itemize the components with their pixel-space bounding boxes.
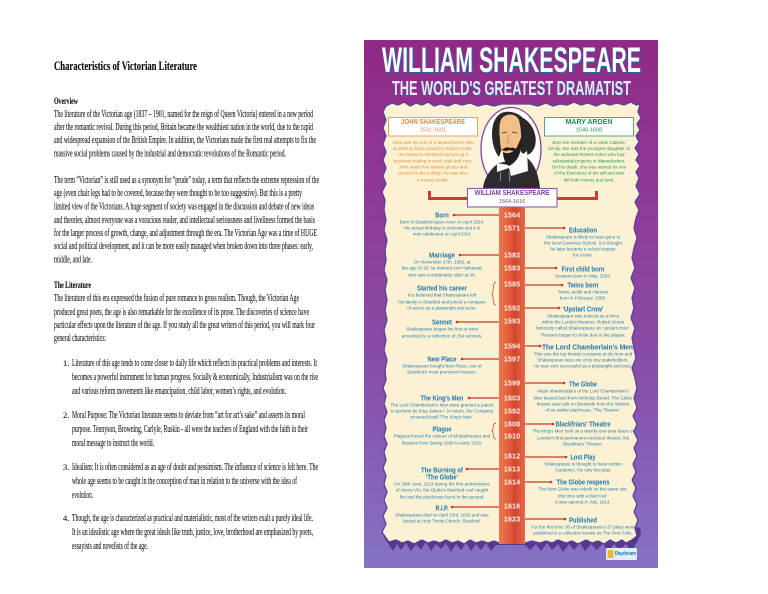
event: The Globe: The Globe	[569, 380, 597, 388]
event: Plague	[394, 424, 491, 446]
paragraph: overview one: massive social problems caused by the industrial and democratic revolutions of the Romantic period.	[54, 148, 286, 160]
Mary Arden card: MARY ARDEN	[566, 119, 612, 126]
event: The Lord Chamberlain's Men: This was the top theatre company at the time and	[534, 352, 633, 356]
event: The Burning of The Globe	[394, 466, 490, 500]
event: Upstart Crow: famously called Shakespeare an 'upstart crow'.	[536, 326, 630, 330]
event: The Globe: of an earlier playhouse, 'The Theatre'.	[545, 408, 621, 412]
event: First child born: Susanna born in May, 1583.	[555, 274, 611, 278]
John Shakespeare card: worked on land owned by Robert Arden.	[393, 146, 473, 151]
paragraph: the literature	[54, 293, 315, 344]
timeline years: 1612	[504, 452, 520, 460]
event: The Globe: theatre was built on Bankside from the timbers	[537, 402, 630, 406]
event: New Place: Shakespeare bought New Place, one of	[402, 364, 482, 368]
John Shakespeare card	[388, 118, 478, 182]
paragraph: overview two: limited view of the Victorians. A huge segment of society was engaged in the discussion and debate of new ideas	[54, 202, 314, 212]
event: The Globe reopens: The New Globe was rebuilt on the same site,	[538, 486, 628, 492]
event: Started his career: his family in Stratford and joined a company	[398, 300, 486, 304]
timeline years: 1610	[504, 432, 520, 440]
event: Lost Play: 'Cardenio', his only lost play.	[555, 468, 611, 472]
John Shakespeare card: 1531-1601	[420, 128, 446, 134]
event: Upstart Crow: within the London theatres. Robert Green	[542, 320, 625, 324]
timeline years: 1597	[504, 354, 520, 364]
event: Sonnet: amounted to a collection of 154 sonnets.	[402, 334, 482, 338]
timeline years: 1613	[504, 464, 520, 474]
event: Education: Education	[569, 226, 597, 234]
timeline years: 1592	[504, 406, 520, 416]
event: Published: Published	[569, 516, 597, 524]
event: Started his career: Started his career	[417, 284, 467, 292]
list item 1	[63, 358, 318, 397]
event: The Globe reopens: The Globe reopens	[556, 478, 610, 486]
event: The King's Men: The Lord Chamberlain's Men were granted a patent	[391, 402, 494, 408]
timeline years: 1592	[504, 304, 520, 312]
event: Lost Play: Lost Play	[570, 452, 596, 462]
event: Education: the local Grammar School. It is thought	[544, 240, 623, 246]
event: Twins born: Twins Judith and Hamnet	[558, 290, 609, 294]
event: Twins born	[558, 280, 609, 300]
John Shakespeare card: purses for the nobility. He was also	[398, 170, 468, 176]
name plate: William Shakespeare: WILLIAM SHAKESPEARE	[474, 190, 550, 197]
event: Marriage: On November 27th, 1582, at	[414, 260, 471, 264]
timeline years	[504, 210, 521, 524]
event: First child born: First child born	[562, 264, 605, 274]
event: Blackfriars' Theatre: Blackfriars' Theatre.	[563, 442, 603, 446]
timeline years: 1583	[504, 264, 520, 272]
event: The King's Men	[391, 394, 494, 420]
event: Born: Born	[435, 210, 449, 220]
John Shakespeare card: business trading in wool, malt and corn.	[393, 158, 473, 164]
event: Education	[544, 226, 623, 258]
event: Education: he later became a school master	[550, 246, 616, 252]
poster background	[364, 40, 658, 568]
Mary Arden card	[544, 118, 634, 182]
Mary Arden card: family, she was the youngest daughter of	[548, 146, 630, 151]
list item 1: and various reform movements like emancipation, child labor, women’s rights, and evolution.	[72, 386, 286, 397]
event: The King's Men: renamed itself 'The King's Men'.	[410, 414, 474, 420]
event: The Burning of The Globe: fire and the playhouse burnt to the ground.	[400, 494, 484, 500]
event: Education: for a time.	[573, 252, 593, 258]
event: The King's Men: to perform by King James I. In return, the Company	[391, 408, 494, 414]
event: Sonnet	[402, 318, 482, 338]
paragraph: overview one: after the romantic revival. During this period, Britain became the wealthiest nation in the world, due to the rapid	[54, 122, 313, 133]
paragraph: the literature: particular effects upon the literature of the age. If you study all the great writers of this period, you will mark four	[54, 320, 315, 331]
list item 2: moral message to instruct the world.	[72, 438, 154, 449]
name plate: William Shakespeare	[468, 188, 557, 207]
list item 1: becomes a powerful instrument for human progress. Socially & economically, Industrialism was on the rise	[72, 372, 318, 383]
event: Born: Born in Stratford-upon-Avon, in April 1564.	[400, 220, 484, 224]
timeline years: 1585	[504, 280, 520, 288]
event: The Globe: Major shareholders of the Lord Chamberlain's	[537, 388, 629, 394]
John Shakespeare card: He moved to Stratford and set up a	[398, 152, 469, 157]
timeline years: 1594	[504, 342, 521, 350]
list item 4: 4.	[63, 513, 69, 523]
event: Plague: theatres from Spring 1608 to early 1610.	[402, 440, 482, 446]
event: Sonnet: Shakespeare began the first of what	[406, 326, 479, 332]
event: New Place: New Place	[428, 354, 456, 364]
list item 3: whole age seems to be caught in the conception of man in relation to the universe with the idea of	[72, 476, 297, 487]
event: Marriage: Marriage	[429, 250, 455, 260]
event: R.I.P.: R.I.P.	[436, 504, 448, 512]
event: The Lord Chamberlain's Men: Shakespeare was one of its key stakeholders.	[537, 358, 629, 362]
name plate: William Shakespeare: 1564-1616	[499, 199, 525, 205]
heading: overview: Overview	[54, 97, 78, 107]
event: Sonnet: Sonnet	[432, 318, 452, 326]
event: The Burning of The Globe: On 29th June, 1613 during the first performance	[394, 482, 490, 486]
document: Characteristics of Victorian Literature	[54, 58, 319, 552]
event: Plague: Plagues forced the closure of all playhouses and	[394, 434, 491, 438]
paragraph: overview two: for the larger process of growth, change, and adjustment through the era. The Victorian Age was a time of HUGE	[54, 228, 317, 239]
subtitle: THE WORLD'S GREATEST DRAMATIST	[392, 77, 631, 100]
paragraph: the literature: general characteristics:	[54, 333, 106, 344]
paragraph: overview two: The term “Victorian” is still used as a synonym for “prude” today, a term that reflects the extreme repression of the	[54, 175, 319, 186]
timeline years: 1623	[504, 514, 520, 524]
Mary Arden card: On his death, she was named as one	[552, 164, 627, 170]
John Shakespeare card: JOHN SHAKESPEARE	[401, 119, 465, 126]
event: The Globe reopens: It was opened in July, 1614.	[555, 500, 611, 504]
event: Published: For the first time 36 of Shakespeare's 37 plays were	[531, 524, 635, 530]
event: Plague: Plague	[432, 424, 452, 434]
paragraph: the literature: produced great poets, the age is also remarkable for the excellence of its prose. The discoveries of science have	[54, 307, 309, 318]
list item 4: Though, the age is characterized as practical and materialistic, most of the writers exalt a purely ideal life.	[72, 513, 313, 524]
Mary Arden card: the widowed Robert Arden who had	[553, 152, 625, 157]
event: Started his career	[398, 284, 486, 310]
event: Born: now celebrated on April 23rd.	[413, 232, 471, 236]
timeline years: 1571	[504, 224, 520, 232]
paragraph: overview two: social and political development, and it can be more easily managed when broken down into three phases: early,	[54, 241, 313, 252]
event: Upstart Crow: 'Upstart Crow'	[562, 304, 604, 314]
event: The Burning of The Globe: of Henry VIII, the Globe's thatched roof caught	[396, 488, 489, 492]
heading: the literature: The Literature	[54, 281, 91, 291]
paragraph: overview one: and widespread expansion of the British Empire. In addition, the Victorians made the first real attempts to fix the	[54, 135, 316, 146]
event: Published: published in a collection known as The First Folio.	[533, 530, 633, 536]
event: R.I.P.: Shakespeare died on April 23rd, 1616 and was	[395, 512, 489, 518]
event: Upstart Crow: Theatres began to close due to the plague.	[540, 332, 626, 338]
event: Blackfriars' Theatre: London's first permanent enclosed theatre, the	[537, 436, 630, 440]
event: The Lord Chamberlain's Men: He was very successful as a playwright and poet.	[534, 364, 632, 368]
paragraph: overview one: The literature of the Victorian age (1837 – 1901, named for the reign of Queen Victoria) entered in a new period	[54, 109, 313, 120]
event: Lost Play: Shakespeare is thought to have written	[544, 462, 622, 466]
John Shakespeare card: John made fine leather gloves and	[399, 164, 468, 170]
Mary Arden card: substantial property in Warwickshire.	[552, 158, 626, 164]
list item 2	[63, 410, 308, 449]
event: The Burning of The Globe: The Burning of	[421, 466, 463, 474]
family tree bracket	[430, 191, 596, 198]
timeline years: 1603	[504, 394, 520, 402]
Mary Arden card: Born the member of a noble Catholic	[552, 140, 626, 145]
John Shakespeare card: John was the son of a tenant farmer who	[392, 140, 474, 145]
event: First child born	[555, 264, 611, 278]
list item 1: 1.	[63, 358, 69, 368]
event: The Globe reopens: this time with a tiled roof.	[558, 494, 608, 498]
event: R.I.P.	[395, 504, 489, 524]
event: The Globe: Men leased land from Nicholas Brend. The Globe	[534, 396, 633, 400]
timeline years: 1608	[504, 420, 520, 428]
event: Published	[531, 516, 635, 536]
poster: William Shakespeare	[364, 40, 658, 568]
event: The Lord Chamberlain's Men	[534, 342, 633, 368]
event: The King's Men: The King's Men	[420, 394, 464, 402]
event: Twins born: born in February, 1585.	[560, 296, 606, 300]
paragraph: overview two: and theories, almost everyone was a voracious reader, and intellectual seriousness and liveliness formed the basis	[54, 215, 315, 226]
event: Lost Play	[544, 452, 622, 472]
paragraph: the literature: The literature of this era expressed the fusion of pure romance to gross realism. Though, the Victorian Age	[54, 293, 299, 304]
list item 3: Idealism: It is often considered as an age of doubt and pessimism. The influence of science is felt here. The	[72, 462, 318, 473]
paragraph: overview two	[54, 175, 319, 266]
event: The Lord Chamberlain's Men: The Lord Chamberlain's Men	[542, 342, 633, 352]
John Shakespeare card: a money lender.	[417, 178, 449, 182]
event: New Place	[402, 354, 482, 374]
event: Marriage: the age of 18, he married Ann Hathaway	[402, 266, 483, 270]
timeline years: 1582	[504, 250, 520, 260]
list item 4	[63, 513, 313, 552]
list item 2: Moral Purpose: The Victorian literature seems to deviate from “art for art’s sake” and asserts its moral	[72, 410, 305, 421]
event: Marriage	[402, 250, 483, 278]
event: The Globe	[534, 380, 633, 412]
document title: Characteristics of Victorian Literature	[54, 58, 197, 73]
list item 3: evolution.	[72, 490, 93, 501]
timeline years: 1616	[504, 502, 520, 510]
event: Blackfriars' Theatre	[532, 420, 634, 446]
list item 4: essayists and novelists of the age.	[72, 541, 148, 552]
paragraph: overview two: age (even chair legs had to be covered, because they were thought to be too suggestive). But this is a pretty	[54, 188, 302, 199]
logo: Daydream: Daydream	[615, 551, 636, 557]
event: Blackfriars' Theatre: Blackfriars' Theatre	[556, 420, 610, 428]
portrait of Shakespeare	[481, 108, 541, 190]
event: Upstart Crow: Shakespeare was noticed as a force	[547, 314, 620, 318]
timeline years: 1599	[504, 378, 520, 388]
list item 2: purpose. Tennyson, Browning, Carlyle, Ruskin - all were the teachers of England with the faith in their	[72, 424, 308, 435]
event: Started his career: of actors as a playwright and actor.	[407, 306, 477, 310]
timeline connector arrows	[452, 215, 566, 519]
paragraph: overview one	[54, 109, 316, 160]
event: Blackfriars' Theatre: The King's Men took on a twenty-one-year lease of	[532, 428, 634, 434]
paragraph: overview two: middle, and late.	[54, 254, 92, 266]
torn edge shadow	[383, 520, 641, 552]
Mary Arden card: left both money and land.	[564, 178, 614, 182]
timeline years: 1593	[504, 316, 520, 326]
event: Born	[400, 210, 484, 236]
timeline years: 1614	[504, 478, 521, 486]
list item 3	[63, 462, 318, 501]
event: Marriage: who was considerably older at 26.	[408, 272, 476, 278]
timeline years: 1564	[504, 210, 521, 220]
event: The Globe reopens	[538, 478, 628, 504]
event: The Burning of The Globe: 'The Globe'	[426, 472, 458, 482]
event: Education: Shakespeare is likely to have gone to	[546, 234, 621, 240]
list item 3: 3.	[63, 462, 69, 472]
event: Born: His actual birthday is unknown but it is	[404, 226, 481, 230]
timeline band	[499, 207, 525, 544]
logo: Daydream	[606, 548, 637, 560]
event: R.I.P.: buried at Holy Trinity Church, Stratford.	[403, 518, 481, 524]
list item 2: 2.	[63, 410, 69, 420]
parchment panel	[382, 102, 641, 544]
Mary Arden card: 1540-1608	[576, 128, 602, 134]
list item 1: Literature of this age tends to come closer to daily life which reflects its practical problems and interests. It	[72, 358, 317, 369]
Mary Arden card: of the Executors of his will and was	[554, 170, 625, 176]
list item 4: It is an idealistic age where the great ideals like truth, justice, love, brotherhood are emphasized by poets,	[72, 527, 313, 538]
event: New Place: Stratford's most prominent houses.	[407, 370, 477, 374]
event: Started his career: It is believed that Shakespeare left	[408, 292, 477, 298]
event: Upstart Crow	[536, 304, 630, 338]
event: Twins born: Twins born	[568, 280, 599, 290]
